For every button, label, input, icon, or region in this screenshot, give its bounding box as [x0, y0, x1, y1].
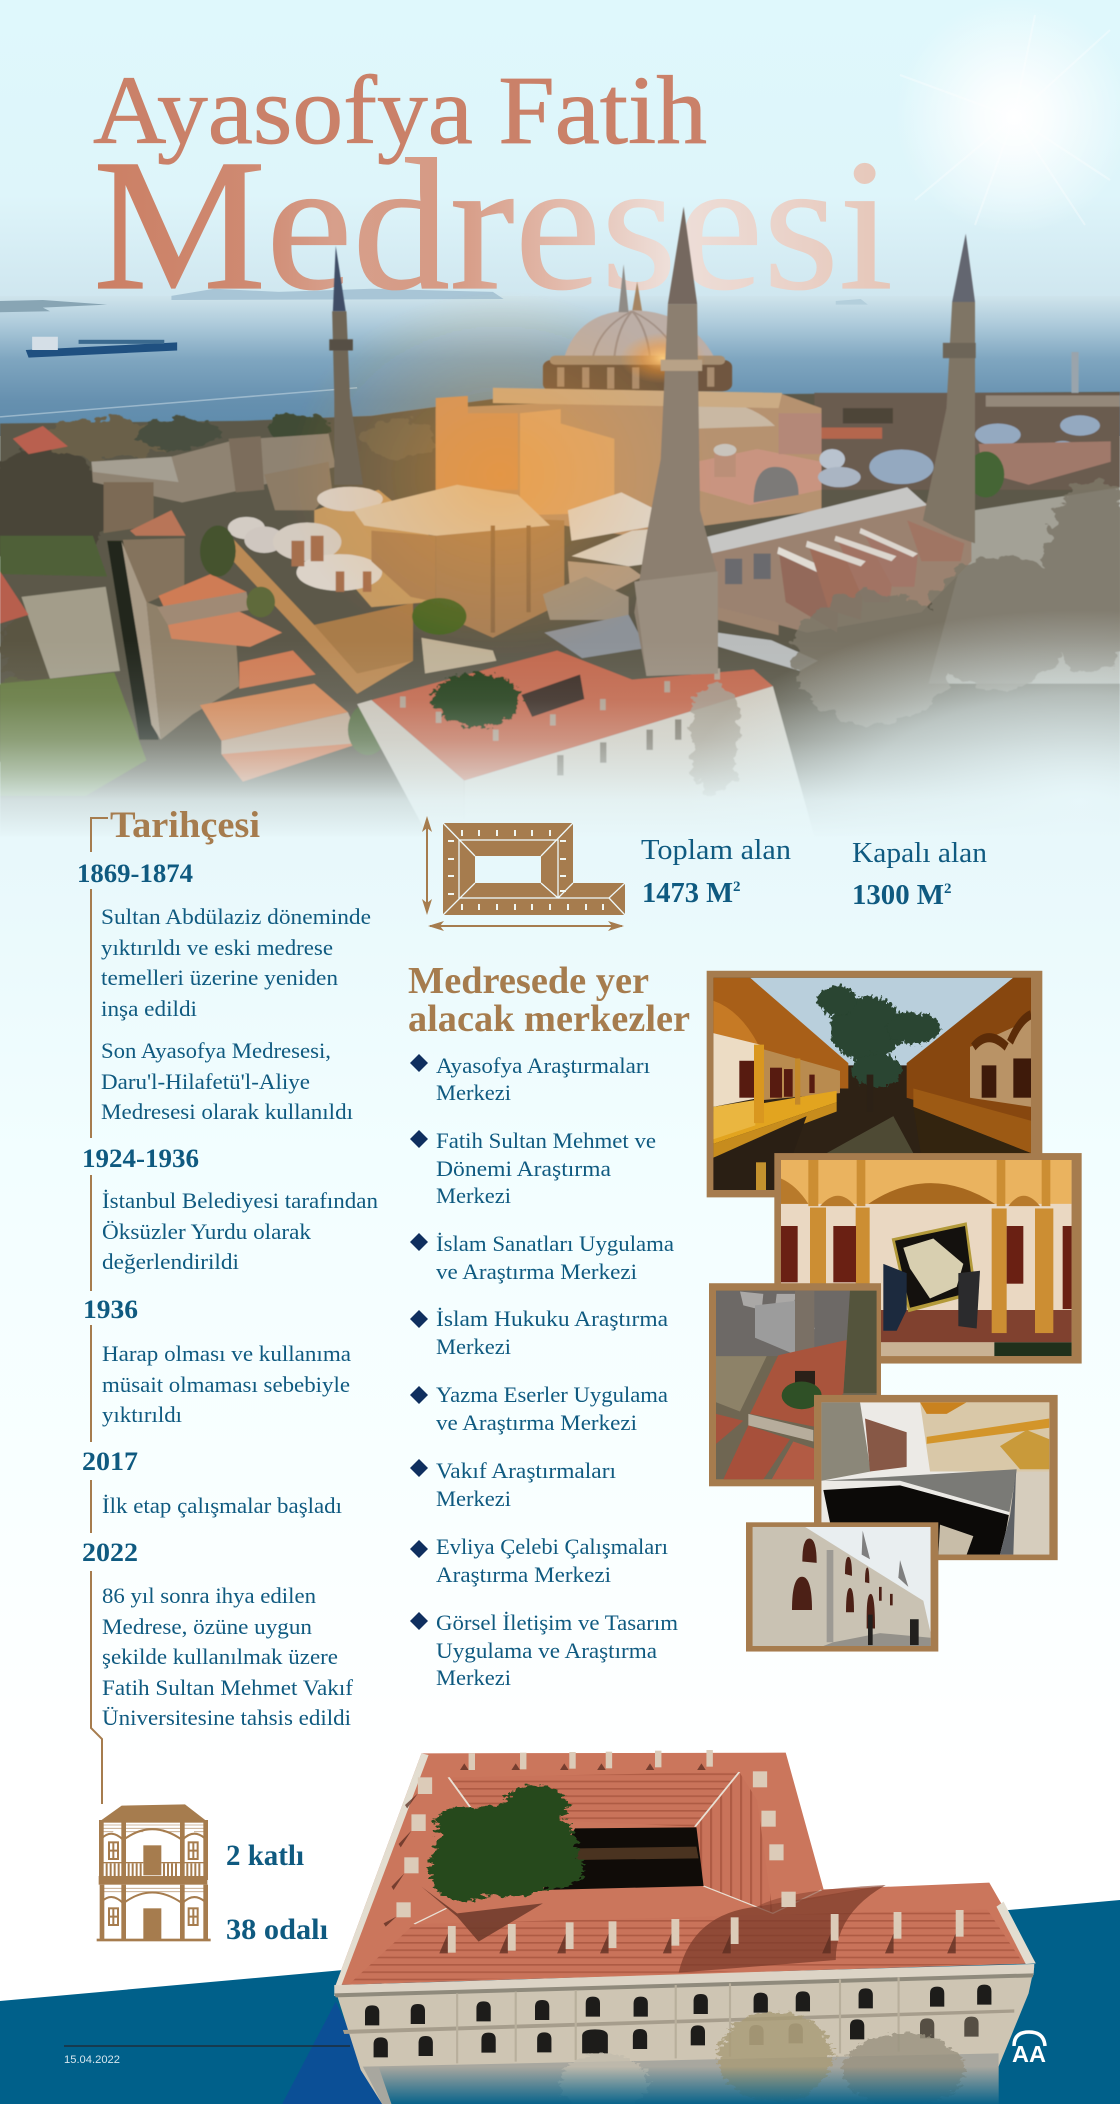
- list labels: Uygulama ve Araştırma: [436, 1638, 657, 1663]
- base fade: [379, 2067, 1000, 2104]
- list labels: Görsel İletişim ve Tasarım: [436, 1610, 678, 1635]
- list labels: Merkezi: [436, 1183, 511, 1208]
- pink section with arch window: [696, 413, 821, 505]
- timeline rule: [91, 818, 108, 1804]
- list labels: [436, 1053, 678, 1690]
- dark blue shadow: [282, 2002, 386, 2104]
- text: Abdülaziz: inşa edildi: [101, 996, 197, 1021]
- date: 1936: 1936: [83, 1295, 138, 1324]
- text: 86 yıl sonra: Üniversitesine tahsis edildi: [102, 1705, 351, 1730]
- far wall and towers: [91, 434, 336, 503]
- list labels: Merkezi: [436, 1080, 511, 1105]
- photo 5: facade of the medrese: [746, 1522, 938, 1652]
- right minaret: [923, 234, 976, 543]
- text: harap: yıktırıldı: [102, 1402, 182, 1427]
- orange buttresses: [354, 396, 614, 638]
- photo 1: courtyard galleries: [707, 971, 1042, 1197]
- title: Medresesi: [93, 120, 893, 329]
- title: Ayasofya Fatih: [93, 57, 707, 164]
- trees left: [0, 413, 436, 770]
- list labels: Dönemi Araştırma: [436, 1156, 611, 1181]
- trees and roofs at the front: [200, 526, 496, 755]
- photo: medrese building from above: [282, 1750, 1036, 2104]
- photo 3: aerial view of the medrese: [709, 1283, 881, 1486]
- facade: [334, 1964, 1034, 2104]
- stat: closed area: [852, 837, 987, 911]
- panel: history timeline: [77, 805, 378, 1804]
- heading: Medresede yer alacak merkezler: Medresede yer: [408, 960, 649, 1002]
- icon: two-storey house: [97, 1804, 211, 1941]
- buildings with domes: [214, 487, 429, 694]
- date: 1869-1874: 1869-1874: [77, 859, 193, 888]
- nave wall and roof: [701, 487, 971, 633]
- icon: floor plan with dimension arrows: [422, 816, 625, 931]
- text: Abdülaziz: Sultan Abdülaziz döneminde: [101, 904, 371, 929]
- date: 2022: 2022: [82, 1538, 138, 1567]
- roof: [336, 1753, 1036, 1985]
- heading: Tarihçesi: Tarihçesi: [110, 805, 260, 846]
- photo 2: workers carrying artwork under the arcade: [774, 1153, 1082, 1364]
- sky and sea backdrop: [0, 0, 1120, 436]
- logo: AA: AA: [1012, 2041, 1046, 2067]
- text: Abdülaziz: Medresesi olarak kullanıldı: [101, 1099, 353, 1124]
- chimneys: [384, 1750, 964, 1953]
- list labels: İslam Hukuku Araştırma: [436, 1306, 668, 1331]
- list labels: ve Araştırma Merkezi: [436, 1259, 637, 1284]
- list labels: Merkezi: [436, 1486, 511, 1511]
- photo 4: excavation and galleries: [814, 1395, 1058, 1560]
- text: Öksüzler Yurdu: [102, 1188, 378, 1274]
- text: Abdülaziz: Daru'l-Hilafetü'l-Aliye: [101, 1069, 310, 1094]
- stat: total area: 1473 M: [642, 878, 733, 909]
- band: bottom blue diagonal: [0, 1900, 1120, 2104]
- cargo ship: [26, 337, 177, 358]
- text: 86 yıl sonra: şekilde kullanılmak üzere: [102, 1644, 338, 1669]
- text: Abdülaziz: yıktırıldı ve eski medrese: [101, 935, 333, 960]
- text: Öksüzler Yurdu: İstanbul Belediyesi tarafından: [102, 1188, 378, 1213]
- list labels: İslam Sanatları Uygulama: [436, 1231, 674, 1256]
- stat: rooms: 38 odalı: [226, 1913, 328, 1946]
- drum and main dome: [543, 282, 732, 391]
- text: Abdülaziz: Son Ayasofya Medresesi,: [101, 1038, 331, 1063]
- list labels: Yazma Eserler Uygulama: [436, 1382, 668, 1407]
- list labels: Vakıf Araştırmaları: [436, 1458, 616, 1483]
- text: Öksüzler Yurdu: Öksüzler Yurdu olarak: [102, 1219, 312, 1244]
- list labels: Araştırma Merkezi: [436, 1562, 611, 1587]
- bare trees lower right: [689, 480, 1120, 796]
- heading: Medresede yer alacak merkezler: [408, 960, 690, 1040]
- distant city on the right: [814, 352, 1120, 490]
- grey small domes and roofs: [543, 492, 818, 671]
- list labels: Merkezi: [436, 1665, 511, 1690]
- sun flare: [896, 0, 1120, 235]
- left minaret: [329, 246, 363, 485]
- list labels: Merkezi: [436, 1334, 511, 1359]
- orange glow: [286, 291, 714, 658]
- photo: Hagia Sophia aerial view: [0, 207, 1120, 837]
- list labels: Fatih Sultan Mehmet ve: [436, 1128, 656, 1153]
- outer wall: [146, 602, 239, 740]
- left roofs: [130, 510, 361, 782]
- date: 15.04.2022: [64, 2054, 120, 2066]
- bullet markers: [410, 1054, 428, 1630]
- left lawn, plaza, moat: [0, 536, 159, 796]
- small spire and center minaret: [619, 264, 629, 312]
- text: harap: müsait olmaması sebebiyle: [102, 1372, 350, 1397]
- list labels: Evliya Çelebi Çalışmaları: [436, 1534, 668, 1559]
- main mass of Hagia Sophia: [436, 393, 821, 536]
- text: 86 yıl sonra: 86 yıl sonra ihya edilen: [102, 1583, 316, 1608]
- text: 86 yıl sonra: [102, 1583, 354, 1730]
- stat: closed area: 1300 M: [852, 880, 944, 911]
- list labels: ve Araştırma Merkezi: [436, 1410, 637, 1435]
- text: Öksüzler Yurdu: değerlendirildi: [102, 1249, 239, 1274]
- date: 2017: 2017: [82, 1447, 138, 1476]
- date: 1924-1936: 1924-1936: [82, 1144, 199, 1173]
- right plaza: [929, 487, 1120, 684]
- medrese roof: [357, 651, 814, 837]
- stat: total area: [641, 834, 792, 909]
- date line: [64, 2045, 350, 2047]
- front trees: [559, 2012, 964, 2104]
- stat: closed area: 2: [944, 881, 952, 897]
- list: centers: [410, 1053, 678, 1690]
- stat: closed area: Kapalı alan: [852, 837, 987, 869]
- text: ilk etap: İlk etap çalışmalar başladı: [102, 1493, 342, 1518]
- photo fade into background: [0, 618, 1120, 838]
- text: Abdülaziz: [101, 904, 371, 1124]
- text: 86 yıl sonra: Medrese, özüne uygun: [102, 1614, 312, 1639]
- stat: total area: 2: [733, 879, 740, 895]
- text: harap: [102, 1341, 351, 1427]
- text: harap: Harap olması ve kullanıma: [102, 1341, 351, 1366]
- text: 86 yıl sonra: Fatih Sultan Mehmet Vakıf: [102, 1675, 354, 1700]
- list labels: Ayasofya Araştırmaları: [436, 1053, 650, 1078]
- cedar tree: [429, 1785, 584, 1902]
- photo collage: [707, 971, 1082, 1652]
- stat: floors: 2 katlı: [226, 1839, 304, 1872]
- heading: Medresede yer alacak merkezler: alacak merkezler: [408, 998, 690, 1040]
- stat: total area: Toplam alan: [641, 834, 792, 866]
- blue side domes: [818, 415, 1100, 487]
- text: Abdülaziz: temelleri üzerine yeniden: [101, 965, 338, 990]
